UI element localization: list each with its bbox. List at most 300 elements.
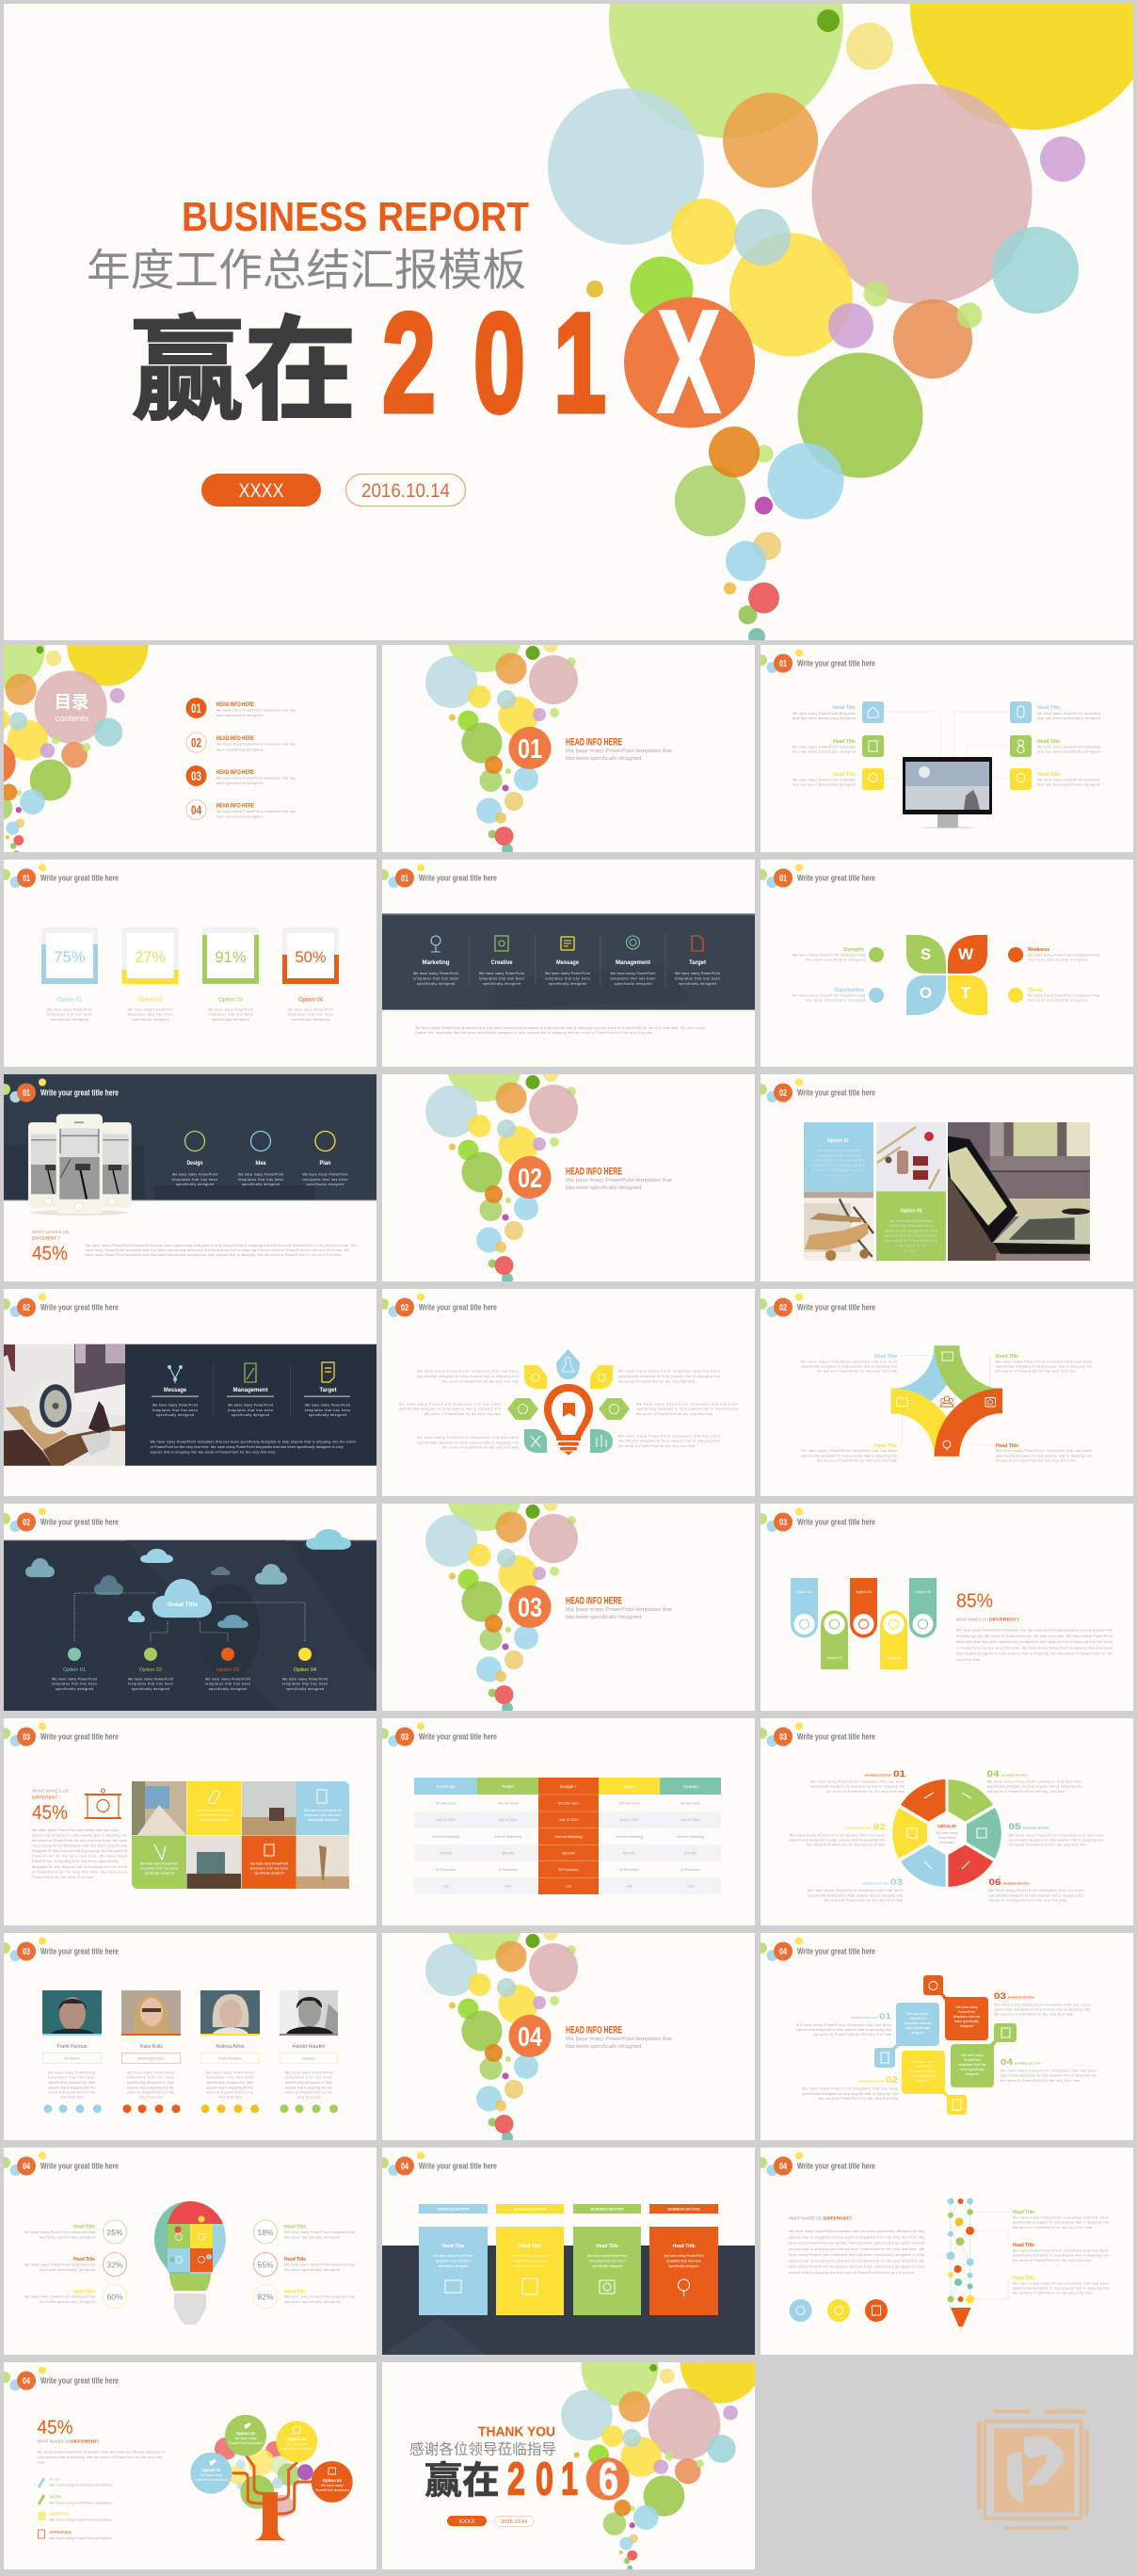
table row marketing: [432, 1835, 704, 1839]
creative column: specifically designed: [483, 982, 520, 986]
header: 03: [779, 1732, 787, 1743]
list observe: We have many PowerPoint templates: [49, 2518, 113, 2521]
right item 3: Head Title: [1037, 772, 1060, 778]
paragraph: have many PowerPoint templates that has been specifically designed to help anyone that is stepping into the world of PowerPoint for the very first time.: [86, 1253, 342, 1257]
right item 1: specifically designed to help anyone that is stepping into: [1013, 2220, 1109, 2224]
top right text: We have many PowerPoint templates that has been: [996, 1360, 1092, 1363]
yellow block: [902, 2051, 967, 2115]
header: [756, 1938, 875, 1961]
table row users: 90,000 users: [436, 1802, 456, 1806]
creative column: Creative: [491, 960, 513, 966]
plan column: We have many PowerPoint: [303, 1173, 348, 1177]
member Harold Houdini: templates that has been: [285, 2075, 332, 2079]
idea column: [238, 1132, 283, 1186]
header: Write your great title here: [40, 1947, 119, 1956]
header: [377, 1294, 497, 1317]
option 01: We have many PowerPoint: [52, 1678, 97, 1682]
left stat 60%: 60%: [106, 2292, 123, 2301]
bottom left text: We have many PowerPoint templates that has been: [801, 1449, 897, 1453]
header: [756, 2152, 875, 2176]
left text blocks: We have many PowerPoint templates that has been: [417, 1369, 519, 1373]
right item 1: We have many PowerPoint templates: [1037, 712, 1100, 716]
header: 02: [779, 1303, 787, 1313]
right stat 82%: We have many PowerPoint templates that: [284, 2295, 355, 2299]
header: 01: [401, 874, 408, 884]
blue block: designed: [911, 2031, 924, 2035]
option 02 card: the very first: [897, 1244, 925, 1248]
paragraph: very first time: [956, 1658, 980, 1662]
header: 01: [779, 874, 787, 884]
panel: percent slide: [4, 860, 376, 1067]
panel: team slide: [4, 1933, 376, 2140]
question heading: [789, 2216, 852, 2220]
panel: 85% bars slide: [761, 1504, 1133, 1711]
label 03: the world of PowerPoint for the very first time: [994, 2013, 1073, 2017]
headline: 2: [507, 2454, 525, 2504]
orange block: designed: [960, 2024, 973, 2028]
stat 45%: 45%: [32, 1802, 68, 1824]
plan column: templates that has been: [303, 1178, 348, 1182]
top left text: specifically designed to help anyone that is stepping into: [801, 1365, 897, 1369]
blue tile: templates that has been: [304, 1813, 342, 1817]
paragraph: have many PowerPoint templates that has been specifically designed to help: [789, 2265, 924, 2269]
panel: phones slide: [4, 1074, 376, 1281]
paragraph: have many PowerPoint templates that has been specifically designed to help: [789, 2242, 924, 2246]
gauge 75%: 75%: [55, 949, 86, 966]
design column: Design: [186, 1161, 203, 1167]
member Kara Kulis: specifically designed to help: [127, 2081, 174, 2085]
option 04: Option 04: [294, 1667, 316, 1673]
petal S: S: [921, 945, 931, 963]
section heading: has been specifically designed.: [566, 1185, 643, 1191]
label 04: BUSINESS SECTION: [1015, 2062, 1041, 2066]
right stat 55%: We have many PowerPoint templates that: [284, 2263, 355, 2267]
section heading: HEAD INFO HERE: [566, 736, 622, 748]
header: 04: [401, 2162, 408, 2172]
member Kara Kulis: Kara Kulis: [140, 2044, 163, 2050]
stat 85%: [956, 1590, 1019, 1621]
label 01: [796, 2011, 891, 2037]
option 01 card: anyone that is stepping into: [812, 1164, 865, 1167]
table row promotion: 11 Promotion: [498, 1868, 518, 1872]
paragraph: PowerPoint for the very first time: [32, 1876, 93, 1879]
item 06: [988, 1877, 1084, 1902]
yellow tile: We have many PowerPoint: [196, 1809, 233, 1812]
label 04: We have many PowerPoint templates that has been: [1001, 2069, 1097, 2073]
main headline: [131, 279, 720, 443]
header: 04: [23, 2376, 30, 2387]
tree circle 02: We have many: [234, 2437, 257, 2440]
option 02 card: specifically designed to help: [885, 1230, 937, 1233]
table row price: $10,000: [623, 1851, 635, 1855]
item 01: We have many PowerPoint templates that has: [216, 708, 296, 712]
panel: puzzle bulb slide: [4, 2148, 376, 2355]
panel: contents slide: [4, 645, 376, 852]
paragraph: [956, 1629, 1113, 1662]
message column: We have many PowerPoint: [545, 972, 590, 975]
card 1: templates that has been: [436, 2260, 471, 2263]
paragraph: anyone that is stepping into the world of PowerPoint for the very first time. We: [789, 2247, 924, 2251]
weakness: We have many PowerPoint templates that: [1028, 953, 1099, 957]
option 02 card: the world of PowerPoint for: [885, 1239, 938, 1243]
tree circle 02: Option 02: [236, 2431, 256, 2436]
management column: We have many PowerPoint: [610, 972, 656, 975]
idea column: specifically designed: [242, 1183, 280, 1186]
member Kara Kulis: world of PowerPoint for the: [127, 2090, 174, 2094]
right text blocks: We have many PowerPoint templates that has been: [636, 1403, 738, 1407]
right stat 55%: has been specifically designed: [284, 2268, 340, 2272]
table row link: Link: [566, 1885, 571, 1889]
photo: wooden plane: [804, 1191, 873, 1261]
petal S: [906, 935, 946, 974]
table row link: Link: [504, 1885, 511, 1889]
item 03: HEAD INFO HERE: [216, 769, 254, 776]
bottom right text: We have many PowerPoint templates that has been: [996, 1449, 1092, 1453]
member Kara Kulis: [121, 1990, 181, 2113]
top right text: [996, 1354, 1092, 1373]
petal W: [948, 935, 987, 974]
item 01: the world of PowerPoint for the very first time: [826, 1790, 905, 1794]
member Frank Furious: specifically designed to help: [48, 2081, 95, 2085]
item 02: We have many PowerPoint templates that has been: [790, 1834, 885, 1838]
paragraph: anyone that is stepping into the world of PowerPoint for the very first time.: [151, 1450, 277, 1454]
left stat 32%: [24, 2252, 126, 2277]
puzzle bulb: [154, 2201, 226, 2325]
design column: We have many PowerPoint: [172, 1173, 217, 1177]
right item 3: the world of PowerPoint for the very first time: [1013, 2292, 1092, 2295]
header: Write your great title here: [40, 1088, 119, 1098]
headline: [424, 2450, 618, 2504]
right stat 18%: has been specifically designed: [284, 2235, 340, 2239]
table row price: $30,000: [563, 1851, 574, 1855]
marketing column: specifically designed: [417, 982, 455, 986]
header: 03: [779, 1518, 787, 1528]
chinese subtitle: 感谢各位领导莅临指导: [409, 2439, 556, 2459]
card 4: Head Title: [673, 2244, 696, 2249]
paragraph: many PowerPoint templates that has been specifically: [32, 1844, 127, 1848]
paragraph: PowerPoint templates that has been specifically: [32, 1860, 119, 1863]
tree circle 03: [276, 2421, 317, 2462]
left item 2: We have many PowerPoint templates: [793, 746, 856, 749]
section heading: has been specifically designed.: [566, 1615, 643, 1620]
petal T: [948, 975, 987, 1015]
option 02 card: time.: [904, 1248, 918, 1252]
right item 1: [1013, 2210, 1109, 2230]
top right text: specifically designed to help anyone that is stepping into: [996, 1365, 1092, 1369]
list plan: [38, 2477, 113, 2488]
left stat 25%: Head Title: [73, 2224, 95, 2230]
yellow tile: templates that has been: [196, 1813, 233, 1817]
header: Write your great title here: [797, 1088, 875, 1098]
paragraph: is stepping into the world of PowerPoint for the very first time. We have many PowerPoint: [956, 1634, 1113, 1638]
paragraph: of PowerPoint for the very first time. We have many PowerPoint templates that has been specifically designed to help: [151, 1445, 344, 1449]
petal O: O: [920, 984, 932, 1002]
bubble cluster: [548, 0, 1137, 645]
label 01: We have many PowerPoint templates that has been: [796, 2023, 891, 2027]
gauge 27%: templates that has been: [128, 1013, 173, 1017]
right item 3: that has been specifically designed: [1037, 783, 1100, 787]
strengths: [793, 947, 884, 962]
header: [377, 2152, 497, 2176]
management column: specifically designed: [614, 982, 652, 986]
yellow tile: specifically designed: [200, 1818, 230, 1822]
gauge 75%: [41, 927, 98, 1022]
idea column: templates that has been: [238, 1178, 283, 1182]
tree circle 01: PowerPoint templates: [194, 2478, 229, 2482]
orange block: been specifically: [954, 2020, 979, 2023]
paragraph: We have many PowerPoint templates that has been specifically designed to: [38, 2450, 166, 2454]
item 03: specifically designed to help anyone that is stepping into: [808, 1894, 903, 1898]
circular diagram: We have many: [936, 1831, 958, 1835]
left stat 60%: Head Title: [73, 2290, 95, 2295]
left stat 25%: We have many PowerPoint templates that: [24, 2230, 95, 2234]
option 02: Option 02: [139, 1667, 162, 1673]
main headline: 0: [473, 283, 525, 442]
thank you title: THANK YOU: [478, 2425, 555, 2440]
paragraph: PowerPoint for the very first time. We have many: [32, 1855, 127, 1859]
bar option 02: [821, 1610, 848, 1669]
header: [756, 1508, 875, 1532]
item 02: BUSINESS SECTION: [845, 1827, 872, 1830]
gauge 75%: specifically designed: [51, 1018, 88, 1022]
item 03: 03: [191, 768, 201, 783]
chinese subtitle: 年度工作总结汇报模板: [87, 235, 526, 298]
item 05: the world of PowerPoint for the very first time: [1009, 1843, 1087, 1847]
item 03: been specifically designed.: [216, 781, 264, 785]
panel: dark band slide: [382, 860, 755, 1067]
right item 1: We have many PowerPoint templates that has been: [1013, 2216, 1109, 2220]
mosaic photos: [132, 1781, 349, 1889]
label 01: 01: [879, 2011, 891, 2021]
tree circle 02: [225, 2415, 266, 2456]
gauge 75%: templates that has been: [47, 1013, 92, 1017]
paragraph: [38, 2450, 166, 2465]
header: 03: [23, 1732, 30, 1743]
gauge 27%: 27%: [135, 949, 166, 966]
section number: 01: [518, 734, 542, 765]
option 01 card: the world of PowerPoint for: [812, 1168, 866, 1172]
left text blocks: [399, 1369, 519, 1450]
tree circle 02: PowerPoint templates: [229, 2441, 263, 2445]
table row marketing: Internet Marketing: [494, 1835, 521, 1839]
stat 45%: [32, 1230, 69, 1264]
paragraph: specifically designed to help anyone that is stepping into the world of PowerPoint for the: [956, 1651, 1113, 1655]
table row promotion: 10 Promotion: [681, 1868, 700, 1872]
table row link: Link: [442, 1885, 449, 1889]
paragraph: anyone that is stepping into the world of PowerPoint for the very first time. We: [789, 2259, 924, 2262]
green block: PowerPoint: [964, 2058, 981, 2062]
circular diagram: templates: [939, 1841, 954, 1844]
header: [377, 1723, 497, 1747]
item 01: been specifically designed.: [216, 714, 264, 717]
item 04: 04: [986, 1769, 1000, 1779]
bar option 02: Option 02: [826, 1656, 842, 1660]
tree circle 04: PowerPoint templates: [315, 2488, 349, 2492]
header: 01: [779, 659, 787, 669]
member Andrea Arbor: [200, 1990, 260, 2113]
table row date: July 12 2012: [436, 1818, 456, 1822]
item 04: 04: [191, 802, 201, 817]
right text blocks: the world of PowerPoint for the very first time: [618, 1444, 695, 1448]
header: Write your great title here: [40, 1518, 119, 1527]
section heading: [566, 2024, 672, 2050]
item 03: 03: [890, 1877, 903, 1887]
card 2: Head Title: [519, 2244, 541, 2249]
blue block: [874, 2003, 939, 2068]
header: [0, 2367, 119, 2391]
panel: tree slide: [4, 2362, 376, 2569]
left item 2: [793, 735, 884, 757]
label 03: We have many PowerPoint templates that has been: [994, 2004, 1090, 2007]
right item 2: the world of PowerPoint for the very first time: [1013, 2259, 1092, 2262]
paragraph: templates that has been specifically designed to help anyone that is stepping into the world: [956, 1640, 1113, 1644]
question heading: WHAT MAKES US: [789, 2216, 822, 2220]
main headline: 1: [553, 283, 606, 442]
header: 02: [23, 1518, 30, 1528]
marketing column: templates that has been: [413, 977, 458, 981]
header: [0, 1508, 119, 1532]
table stripes: [414, 1811, 721, 1894]
card 3: [573, 2204, 641, 2315]
panel: four cards slide: [382, 2148, 755, 2355]
right stat 82%: Head Title: [284, 2290, 306, 2295]
left item 2: Head Title: [833, 739, 856, 745]
label 04: [1001, 2057, 1097, 2083]
member Andrea Arbor: Public Relations: [218, 2056, 242, 2060]
item 06: We have many PowerPoint templates that has been: [988, 1889, 1084, 1892]
item 06: BUSINESS SECTION: [1003, 1881, 1030, 1885]
blue block: PowerPoint: [909, 2017, 926, 2021]
item 05: 05: [1009, 1822, 1020, 1831]
strengths: Strengths: [843, 947, 864, 953]
item 02: 02: [191, 734, 201, 749]
date pill: [494, 2516, 534, 2526]
card 2: BUSINESS SECTION: [514, 2207, 547, 2211]
target column: templates that has been: [305, 1409, 350, 1412]
option 01 card: specifically designed to help: [812, 1158, 865, 1162]
header: Write your great title here: [797, 1518, 875, 1527]
header: Write your great title here: [40, 1732, 119, 1742]
option 02: specifically designed: [132, 1687, 169, 1691]
pinwheel cross: [891, 1345, 1002, 1457]
circular diagram: CIRCULAR: [937, 1824, 957, 1828]
management column: specifically designed: [232, 1413, 269, 1417]
creative column: [479, 936, 524, 986]
creative column: templates that has been: [479, 977, 524, 981]
table row marketing: Internet Marketing: [432, 1835, 459, 1839]
stat 85%: WHAT MAKES US: [956, 1618, 987, 1621]
idea column: Idea: [256, 1161, 266, 1167]
left item 1: Head Title: [833, 705, 856, 711]
option 03: We have many PowerPoint: [205, 1678, 250, 1682]
message column: We have many PowerPoint: [152, 1403, 198, 1407]
stat 85%: 85%: [956, 1590, 993, 1612]
bar option 05: [909, 1578, 937, 1638]
member Andrea Arbor: templates that has been: [206, 2075, 253, 2079]
header: Write your great title here: [419, 1303, 497, 1312]
right item 1: Head Title: [1013, 2210, 1034, 2215]
leader lines: [900, 1355, 990, 1445]
creative column: We have many PowerPoint: [479, 972, 524, 975]
header: Write your great title here: [40, 2162, 119, 2171]
yellow tile: [186, 1781, 241, 1835]
item 06: 06: [988, 1877, 1001, 1887]
gauge 27%: [122, 927, 179, 1022]
date pill: [346, 475, 465, 507]
header: 02: [779, 1088, 787, 1099]
headline: 6: [599, 2454, 618, 2504]
design column: specifically designed: [176, 1183, 214, 1186]
item 04: [186, 800, 296, 819]
left text blocks: the world of PowerPoint for the very first time: [442, 1380, 519, 1384]
monitor illustration: [903, 757, 992, 829]
item 05: [1009, 1822, 1104, 1847]
green tile: [132, 1836, 186, 1889]
tree circle 04: Option 04: [323, 2478, 342, 2483]
member Andrea Arbor: We have many PowerPoint: [206, 2071, 253, 2075]
item 01: HEAD INFO HERE: [216, 701, 254, 708]
header: [756, 864, 875, 888]
header: [0, 1079, 119, 1103]
tree trunk and branches: [232, 2455, 313, 2540]
stat 45%: WHAT MAKES US: [38, 2439, 71, 2444]
header: Write your great title here: [40, 2376, 119, 2386]
header: [0, 1294, 119, 1317]
item 04: the world of PowerPoint for the very first time: [986, 1790, 1065, 1794]
dividers: [214, 1364, 290, 1417]
right item 3: We have many PowerPoint templates: [1037, 778, 1100, 781]
left text blocks: We have many PowerPoint templates that has been: [417, 1436, 519, 1440]
gauge 91%: templates that has been: [208, 1013, 253, 1017]
card 4: [649, 2204, 718, 2315]
header: Write your great title here: [797, 659, 875, 668]
member Harold Houdini: We have many PowerPoint: [285, 2071, 332, 2075]
target column: Target: [320, 1388, 337, 1393]
message column: [545, 937, 590, 986]
design column: [172, 1132, 217, 1186]
list plan: PLAN: [49, 2477, 59, 2482]
card 1: We have many PowerPoint: [433, 2254, 473, 2258]
label 02: [802, 2075, 898, 2101]
green block: [951, 2023, 1017, 2087]
yellow block: PowerPoint: [915, 2065, 932, 2069]
presenter pill: XXXX: [458, 2519, 475, 2525]
table headers: Facebook: [437, 1784, 456, 1789]
stat 45%: DIFFERENT ?: [32, 1235, 61, 1241]
right stat 18%: [254, 2220, 355, 2244]
bar option 03: [850, 1578, 877, 1638]
panel: cloud diagram slide: [4, 1504, 376, 1711]
section heading: has been specifically designed.: [566, 756, 643, 762]
paragraph: [151, 1441, 356, 1454]
panel: section 02 divider: [382, 1074, 755, 1281]
option 03: templates that has been: [205, 1682, 250, 1685]
header: [377, 864, 497, 888]
table row users: 100,000 users: [497, 1802, 519, 1806]
dark band: [382, 913, 755, 1010]
member Andrea Arbor: specifically designed to help: [206, 2081, 253, 2085]
blue block: We have many: [906, 2012, 929, 2016]
management column: Management: [616, 960, 650, 966]
bubbles: [425, 597, 578, 855]
label 02: the world of PowerPoint for the very first time: [819, 2097, 898, 2101]
right stat 82%: has been specifically designed: [284, 2300, 340, 2304]
item 02: We have many PowerPoint templates that has: [216, 743, 296, 747]
gauge 50%: We have many PowerPoint: [288, 1007, 333, 1011]
list observe: [38, 2512, 113, 2521]
item 01: [186, 698, 296, 718]
table headers: Youtube: [682, 1784, 698, 1789]
